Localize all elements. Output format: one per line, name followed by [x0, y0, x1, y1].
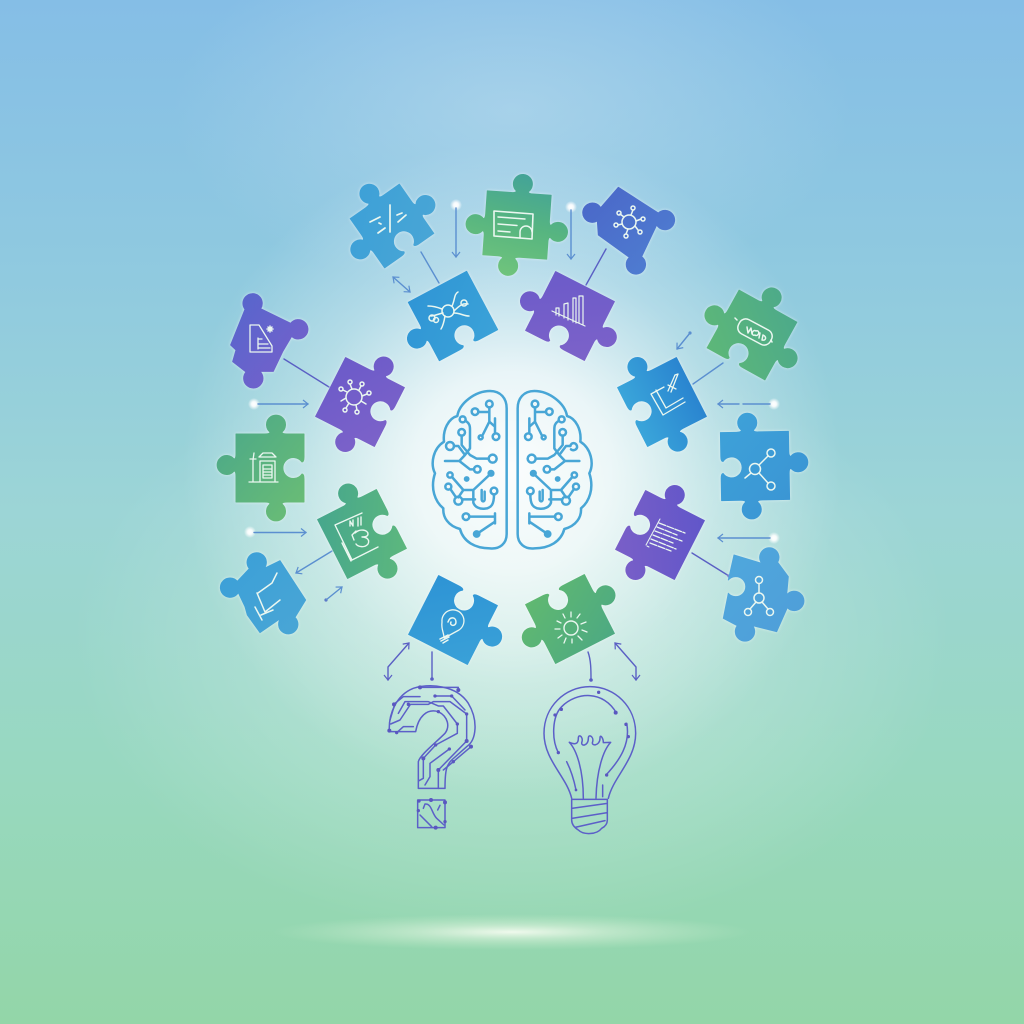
double arrow: top left	[393, 277, 410, 292]
inner reflections	[554, 696, 628, 797]
piece shape	[231, 294, 308, 388]
puzzle piece: left upper small indigo	[231, 294, 308, 388]
traces	[390, 687, 471, 788]
puzzle piece: right upper green	[691, 264, 823, 389]
right circuit traces	[525, 401, 579, 537]
puzzle piece: top center green	[463, 171, 571, 279]
bulb glass	[544, 687, 636, 798]
central circuit brain	[433, 391, 592, 548]
icon: small light bulb	[440, 610, 464, 643]
right hemisphere	[518, 391, 592, 548]
spark arrow: right upper	[718, 398, 780, 410]
icon: sun	[555, 612, 587, 643]
icon: pencil and frame	[651, 374, 685, 415]
right hemisphere outline	[518, 391, 592, 548]
piece shape	[463, 171, 571, 279]
question mark dot square	[417, 798, 447, 830]
piece shape	[609, 341, 715, 463]
puzzle piece: right center blue	[720, 412, 809, 519]
icon: checkmark chart	[255, 573, 280, 620]
lower pale glow	[0, 300, 1024, 980]
spark arrow: right lower	[718, 532, 780, 544]
left hemisphere	[433, 391, 507, 548]
spark arrow: left upper	[248, 398, 308, 410]
piece shape	[509, 566, 631, 672]
piece shape	[409, 576, 514, 673]
piece shape	[324, 158, 449, 279]
square	[418, 800, 445, 828]
arrow: left bottom double	[324, 587, 342, 602]
icon: open book	[335, 513, 378, 561]
icon: divider and bars	[370, 205, 406, 233]
screw base	[572, 799, 607, 834]
arrow: left lower link	[296, 551, 332, 573]
puzzle piece: right lower purple	[607, 474, 713, 596]
link: right upper pieces	[693, 363, 723, 384]
icon: bar chart	[552, 296, 585, 326]
icon: hub with nodes	[614, 206, 645, 238]
top light glow	[0, 0, 1024, 400]
spark arrow: top left	[450, 199, 462, 257]
link: top-right pieces	[586, 249, 606, 285]
circuit question mark	[387, 685, 475, 830]
icon: hub with spokes	[339, 380, 371, 414]
bulb nodes	[553, 691, 630, 791]
piece shape	[392, 271, 498, 369]
traces	[420, 804, 444, 827]
puzzle piece: left bottom small blue	[220, 553, 306, 634]
puzzle piece: inner top right purple	[509, 263, 631, 369]
link: right lower pieces	[692, 553, 731, 578]
puzzle piece: top right indigo	[583, 187, 675, 274]
puzzle piece: top left blue	[324, 158, 449, 279]
piece shape	[509, 263, 631, 369]
spark arrow: left lower	[244, 526, 306, 538]
outline	[389, 686, 475, 788]
piece shape	[723, 548, 804, 641]
icon: three node graph	[744, 576, 774, 616]
piece shape	[583, 187, 675, 274]
puzzle piece: inner top left blue	[392, 271, 498, 369]
piece shape	[607, 474, 713, 596]
arrow: bottom left to question mark	[430, 652, 434, 681]
hemisphere outline	[433, 391, 507, 548]
nodes	[417, 798, 447, 830]
puzzle piece: bottom right green	[509, 566, 631, 672]
icon: document triangle	[250, 325, 273, 352]
puzzle piece: right upper blue	[609, 341, 715, 463]
link: left upper pieces	[284, 359, 329, 387]
piece shape	[720, 412, 809, 519]
puzzle piece: left upper purple	[307, 341, 413, 463]
floor light reflection	[240, 905, 784, 960]
filament	[569, 736, 611, 798]
piece shape	[309, 473, 415, 595]
arrow: right upper	[677, 331, 692, 349]
nodes	[387, 685, 473, 772]
piece shape	[691, 264, 823, 389]
piece shape	[220, 553, 306, 634]
outline light bulb	[544, 687, 636, 834]
icon: certificate card	[494, 211, 533, 239]
spark arrow: top right	[565, 201, 577, 259]
piece shape	[307, 341, 413, 463]
puzzle piece: bottom left blue	[409, 576, 514, 673]
icon: molecule nodes	[745, 449, 775, 490]
piece shape	[217, 415, 304, 521]
puzzle piece: left center green	[217, 415, 304, 521]
puzzle piece: right bottom small blue	[723, 548, 804, 641]
icon: tag label	[735, 316, 775, 348]
arrow: bottom right to bulb	[588, 652, 593, 682]
icon: text document	[646, 519, 685, 551]
question mark curve	[387, 685, 475, 788]
puzzle piece: left lower green	[309, 473, 415, 595]
arrow: bottom left elbow	[388, 643, 409, 680]
circuit traces	[445, 401, 499, 537]
arrow: bottom right elbow	[615, 643, 636, 680]
icon: network node	[428, 292, 469, 329]
icon: tower and kiosk	[249, 453, 278, 482]
link: top-left pieces	[421, 252, 439, 283]
connector arrows and sparks	[244, 199, 780, 682]
